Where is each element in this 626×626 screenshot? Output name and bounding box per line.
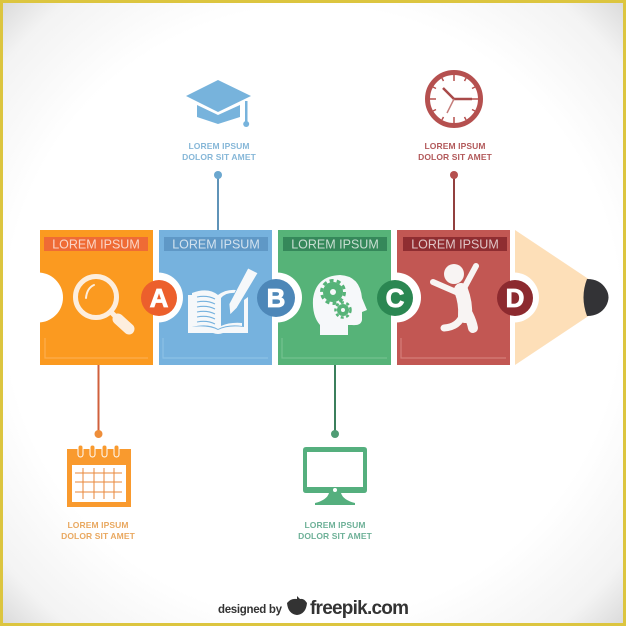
badge A: A	[150, 283, 169, 313]
caption: calendar	[61, 520, 136, 541]
icon: monitor	[303, 447, 367, 505]
panel: D red	[397, 230, 510, 365]
panel: C green	[278, 230, 391, 365]
connector: graduation cap	[214, 171, 222, 230]
pencil graphite	[584, 279, 608, 316]
connector: calendar	[94, 365, 102, 438]
icon: jumping person	[433, 264, 476, 328]
caption: calendar: DOLOR SIT AMET	[61, 531, 136, 541]
caption: monitor	[298, 520, 373, 541]
footer: freepik logo	[218, 596, 409, 619]
badge D: D	[506, 283, 524, 313]
icon: calendar	[67, 445, 131, 507]
caption: clock	[418, 141, 493, 162]
caption: monitor: LOREM IPSUM	[304, 520, 366, 530]
caption: graduation cap	[182, 141, 257, 162]
icon: head with gears	[313, 275, 367, 335]
badge B	[257, 272, 302, 322]
left notch	[13, 272, 63, 322]
badge A	[141, 272, 183, 322]
heading bar C: LOREM IPSUM	[291, 238, 379, 252]
caption: monitor: DOLOR SIT AMET	[298, 531, 373, 541]
heading bar A: LOREM IPSUM	[52, 238, 140, 252]
badge B: B	[267, 283, 285, 313]
icon: graduation cap	[186, 80, 251, 127]
icon: book and pencil	[188, 268, 258, 334]
panel: pencil tip	[515, 230, 608, 365]
panel: A orange	[13, 230, 153, 365]
heading bar D: LOREM IPSUM	[411, 238, 499, 252]
panel: B blue	[159, 230, 272, 365]
footer: freepik logo: designed by	[218, 604, 283, 616]
icon: clock	[428, 72, 480, 126]
caption: clock: LOREM IPSUM	[424, 141, 486, 151]
icon: magnifying glass	[76, 276, 129, 329]
caption: graduation cap: LOREM IPSUM	[188, 141, 250, 151]
caption: calendar: LOREM IPSUM	[67, 520, 129, 530]
icon: freepik mascot	[287, 596, 307, 615]
connector: clock	[450, 171, 458, 230]
heading bar B: LOREM IPSUM	[172, 238, 260, 252]
badge C: C	[386, 283, 405, 313]
badge C	[377, 272, 421, 322]
footer: freepik logo: freepik.com	[310, 598, 409, 619]
caption: clock: DOLOR SIT AMET	[418, 152, 493, 162]
badge D	[497, 272, 539, 322]
caption: graduation cap: DOLOR SIT AMET	[182, 152, 257, 162]
connector: monitor	[331, 365, 339, 438]
